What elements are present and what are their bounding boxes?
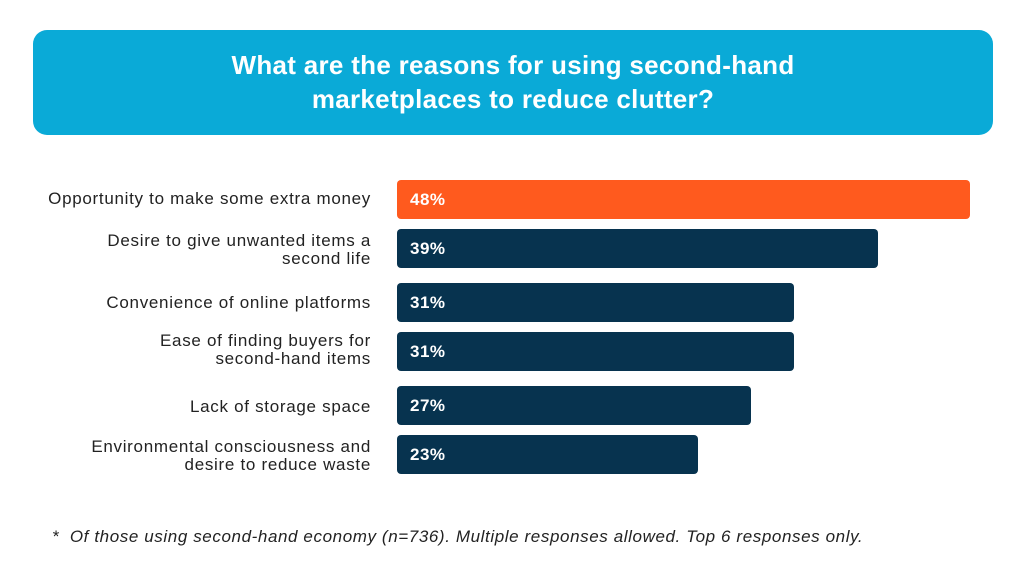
- bar: 23%: [397, 435, 698, 474]
- label: ease of finding buyers: Ease of finding buyers for: [160, 331, 371, 350]
- bar: 23%: 23%: [410, 445, 446, 464]
- bar: 27%: [397, 386, 751, 425]
- label: environmental: [91, 437, 371, 474]
- bar: 39%: [397, 229, 878, 268]
- bar: 48%: 48%: [410, 190, 446, 209]
- label: ease of finding buyers: second-hand items: [215, 349, 371, 368]
- title: marketplaces to reduce clutter?: [312, 84, 714, 114]
- label: second life: Desire to give unwanted items a: [107, 231, 371, 250]
- bar: 31% ease: [397, 332, 794, 371]
- title: What are the reasons for using second-hand: [231, 50, 795, 80]
- label: extra money: Opportunity to make some extra money: [48, 189, 371, 208]
- bar: 31% convenience: [397, 283, 794, 322]
- label: ease of finding buyers: [160, 331, 371, 368]
- footnote: * Of those using second-hand economy (n=736). Multiple responses allowed. Top 6 responses only.: [52, 527, 863, 546]
- bar: 39%: 39%: [410, 239, 446, 258]
- bar: 48%: [397, 180, 970, 219]
- title: [33, 30, 993, 135]
- label: environmental: desire to reduce waste: [185, 455, 371, 474]
- label: storage: Lack of storage space: [190, 397, 371, 416]
- label: convenience: Convenience of online platforms: [106, 293, 371, 312]
- label: second life: [107, 231, 371, 268]
- bar: 31% convenience: 31%: [410, 293, 446, 312]
- label: second life: second life: [282, 249, 371, 268]
- bar: 31% ease: 31%: [410, 342, 446, 361]
- label: environmental: Environmental consciousness and: [91, 437, 371, 456]
- bar: 27%: 27%: [410, 396, 446, 415]
